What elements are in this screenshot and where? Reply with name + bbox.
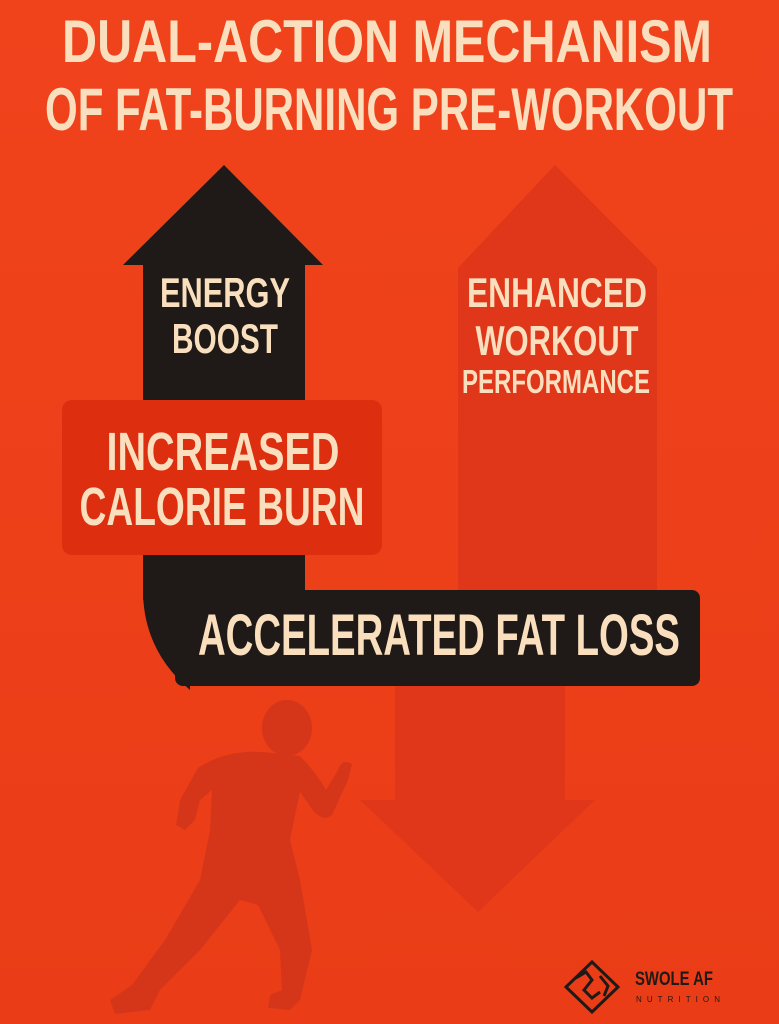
box: increased calorie burn: CALORIE BURN [80, 477, 364, 537]
label: enhanced workout performance: ENHANCED [467, 269, 647, 316]
label: enhanced workout performance: PERFORMANCE [462, 363, 650, 400]
label: enhanced workout performance [462, 269, 650, 400]
label: enhanced workout performance: WORKOUT [476, 317, 639, 364]
logo: swole af nutrition [566, 962, 720, 1012]
box: accelerated fat loss [175, 590, 700, 686]
box: increased calorie burn [62, 400, 382, 555]
arrow: enhanced workout performance (faint) [360, 165, 657, 912]
icon: runner silhouette [110, 700, 352, 1014]
title [45, 8, 733, 143]
label: energy boost: BOOST [172, 315, 278, 362]
label: energy boost: ENERGY [160, 269, 290, 316]
logo: swole af nutrition: SWOLE AF [635, 969, 713, 990]
label: energy boost [160, 269, 290, 362]
logo: swole af nutrition: NUTRITION [636, 995, 720, 1004]
box: increased calorie burn: INCREASED [106, 422, 340, 482]
arrow: energy boost (black) [123, 165, 323, 690]
